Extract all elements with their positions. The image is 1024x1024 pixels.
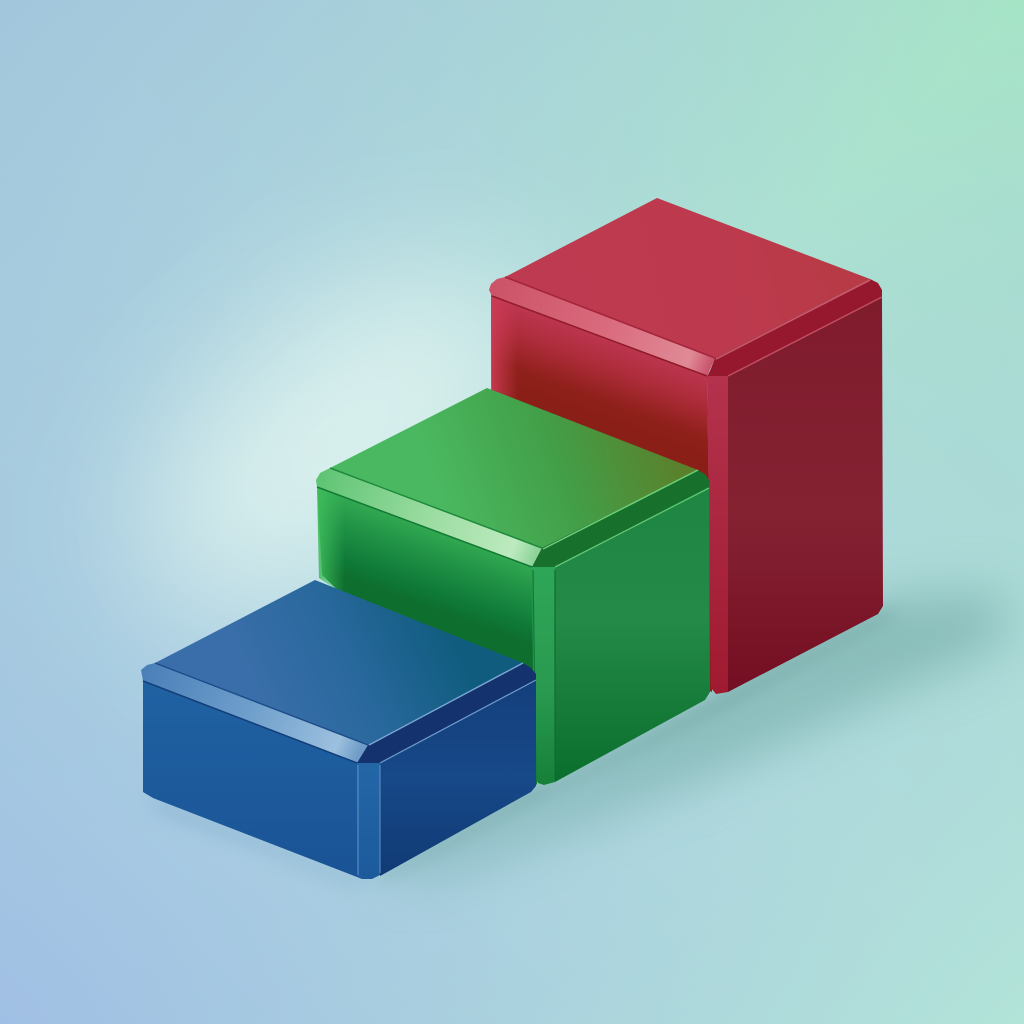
cast shadow — [146, 590, 1010, 885]
green block — [316, 388, 710, 785]
green front bevel — [316, 468, 542, 567]
blue top face — [155, 580, 523, 745]
blue front-left face — [143, 681, 357, 877]
green right bevel — [532, 470, 710, 567]
green right face — [555, 488, 710, 782]
green corner strip — [532, 550, 555, 785]
blue block — [141, 580, 536, 879]
blue front bevel — [141, 663, 368, 763]
red right bevel — [708, 279, 882, 376]
red front-left face — [491, 294, 712, 692]
red front bevel — [489, 277, 715, 376]
blue right face — [380, 680, 536, 876]
red right face — [728, 297, 883, 692]
blue right bevel — [357, 663, 536, 763]
red block — [489, 198, 883, 694]
green front-left face — [317, 486, 537, 785]
red top face — [505, 198, 870, 358]
green top face — [330, 388, 698, 548]
red corner strip — [707, 362, 728, 694]
blue corner strip — [357, 745, 380, 879]
